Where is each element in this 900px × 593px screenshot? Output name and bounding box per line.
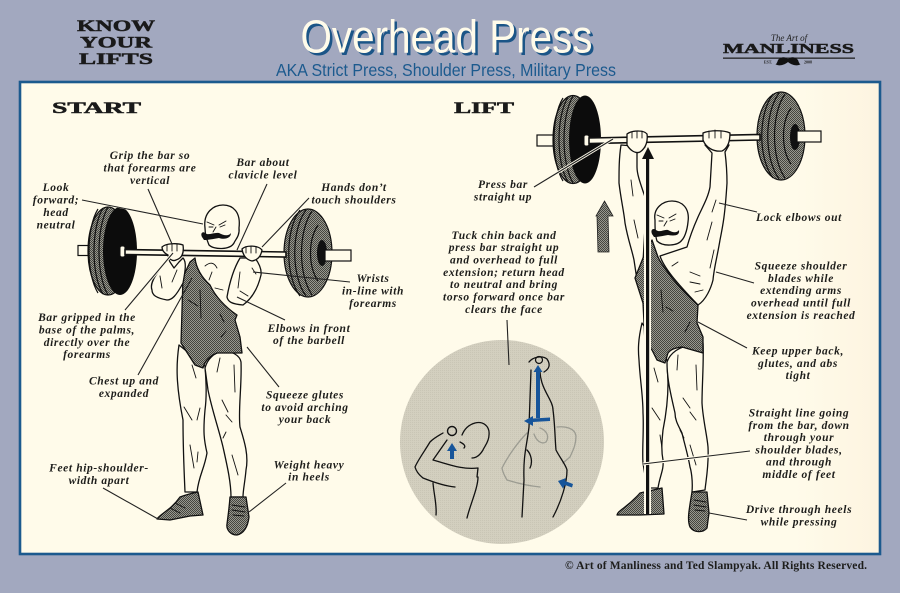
label: tuck chin: to neutral and bring (450, 279, 558, 291)
label: grip: Grip the bar so (110, 150, 190, 162)
badge: Know Your Lifts: YOUR (80, 34, 153, 52)
figure: start position (78, 205, 351, 535)
label: look forward: head (43, 207, 69, 219)
logo: Art of Manliness (723, 33, 855, 65)
left leg (177, 345, 207, 492)
heading: Start: START (52, 100, 142, 117)
label: bar gripped: Bar gripped in the (37, 312, 136, 324)
logo: Art of Manliness: MANLINESS (723, 42, 854, 57)
figure: lift position (537, 92, 821, 532)
logo: Art of Manliness: The Art of (771, 33, 809, 43)
right arm (227, 258, 261, 305)
badge: Know Your Lifts (77, 18, 155, 68)
label: tuck chin: press bar straight up (448, 242, 559, 254)
badge: Know Your Lifts: LIFTS (79, 51, 153, 68)
label: grip: that forearms are (104, 162, 196, 174)
sketch: head back (415, 423, 489, 518)
label: bar gripped: forearms (63, 349, 111, 361)
face details (201, 232, 231, 240)
label: look forward: Look (42, 182, 69, 194)
leotard, lift (635, 240, 703, 363)
leg muscle lines, lift (652, 355, 697, 465)
label: press bar: Press bar (478, 179, 528, 191)
main panel (20, 82, 880, 554)
label: bar about clavicle: Bar about (235, 157, 290, 169)
label: squeeze shoulder blades: Squeeze shoulder (755, 260, 847, 272)
badge: Know Your Lifts: KNOW (77, 18, 155, 35)
leader lines (82, 139, 757, 520)
label: feet: Feet hip-shoulder- (48, 462, 149, 474)
left hand, lift (627, 131, 647, 153)
heading: Lift: LIFT (454, 100, 515, 117)
label: grip: vertical (130, 175, 170, 187)
label: tuck chin: Tuck chin back and (452, 230, 556, 242)
label: hands: Hands don’t (320, 182, 387, 194)
right leg, lift (667, 343, 708, 492)
label: bar gripped: directly over the (44, 337, 130, 349)
label: straight line: from the bar, down (748, 420, 850, 432)
right arm, lift (660, 145, 729, 305)
label: drive through heels: Drive through heels (745, 504, 852, 516)
title: Overhead Press (300, 10, 592, 62)
right leg (205, 352, 247, 497)
right shoe (227, 497, 249, 535)
label: straight line: shoulder blades, (754, 444, 843, 456)
left arm, lift (619, 145, 645, 280)
right hand (242, 246, 262, 261)
label: wrists: Wrists (357, 273, 389, 285)
label: straight line: through your (764, 432, 834, 444)
label: drive through heels: while pressing (761, 516, 837, 528)
label: keep tight: Keep upper back, (751, 346, 844, 358)
label: tuck chin: torso forward once bar (443, 292, 565, 304)
label: tuck chin: and overhead to full (450, 254, 558, 266)
left shoe (157, 492, 203, 520)
sketch: press overhead (502, 356, 576, 517)
label: squeeze shoulder blades: extension is reached (747, 310, 855, 322)
right shoe, lift (689, 492, 709, 532)
label: weight: in heels (288, 472, 330, 484)
label: press bar: straight up (473, 192, 532, 204)
label: squeeze shoulder blades: blades while (768, 273, 834, 285)
right hand, lift (703, 131, 730, 151)
detail circle: head movement (400, 340, 604, 544)
label: tuck chin: clears the face (465, 304, 543, 316)
left arm (151, 258, 185, 300)
label: look forward: neutral (37, 220, 76, 232)
copyright: © Art of Manliness and Ted Slampyak. All Rights Reserved. (565, 560, 867, 572)
label: squeeze shoulder blades: overhead until full (751, 298, 851, 310)
label: hands: touch shoulders (311, 194, 397, 206)
chest lines (205, 263, 223, 290)
left leg, lift (638, 323, 668, 488)
leotard (181, 258, 242, 368)
label: straight line: and through (766, 456, 832, 468)
logo: Art of Manliness: 2008 (804, 60, 812, 64)
barbell, start position (78, 207, 351, 297)
logo: Art of Manliness: EST. (764, 60, 772, 64)
barbell, lift position (537, 92, 821, 184)
label: squeeze glutes: to avoid arching (261, 402, 349, 414)
left hand (162, 244, 183, 261)
label: bar about clavicle: clavicle level (228, 170, 298, 182)
subtitle: AKA Strict Press, Shoulder Press, Military Press (276, 60, 616, 80)
label: squeeze glutes: your back (277, 414, 331, 426)
label: elbows: Elbows in front (267, 323, 351, 335)
label: straight line: Straight line going (749, 408, 849, 420)
label: look forward: forward; (33, 194, 79, 206)
label: wrists: forearms (349, 298, 397, 310)
label: keep tight: tight (786, 370, 811, 382)
label: chest: Chest up and (89, 376, 159, 388)
arrow: vertical bar path (642, 147, 654, 514)
label: keep tight: glutes, and abs (757, 358, 838, 370)
label: weight: Weight heavy (274, 460, 345, 472)
label: lock elbows: Lock elbows out (755, 212, 842, 224)
arrow: upward press direction (596, 201, 613, 252)
neck and head (205, 205, 239, 249)
label: feet: width apart (69, 475, 130, 487)
label: chest: expanded (99, 388, 149, 400)
label: squeeze shoulder blades: extending arms (760, 285, 842, 297)
label: wrists: in-line with (342, 286, 404, 298)
label: elbows: of the barbell (273, 335, 345, 347)
label: squeeze glutes: Squeeze glutes (266, 390, 344, 402)
left shoe, lift (617, 488, 664, 515)
label: bar gripped: base of the palms, (39, 324, 135, 336)
label: tuck chin: extension; return head (443, 267, 565, 279)
label: straight line: middle of feet (762, 469, 836, 481)
face details, lift (651, 229, 679, 237)
head, lift (655, 201, 688, 245)
leg muscle lines (184, 358, 238, 475)
title: Overhead Press (303, 13, 595, 65)
